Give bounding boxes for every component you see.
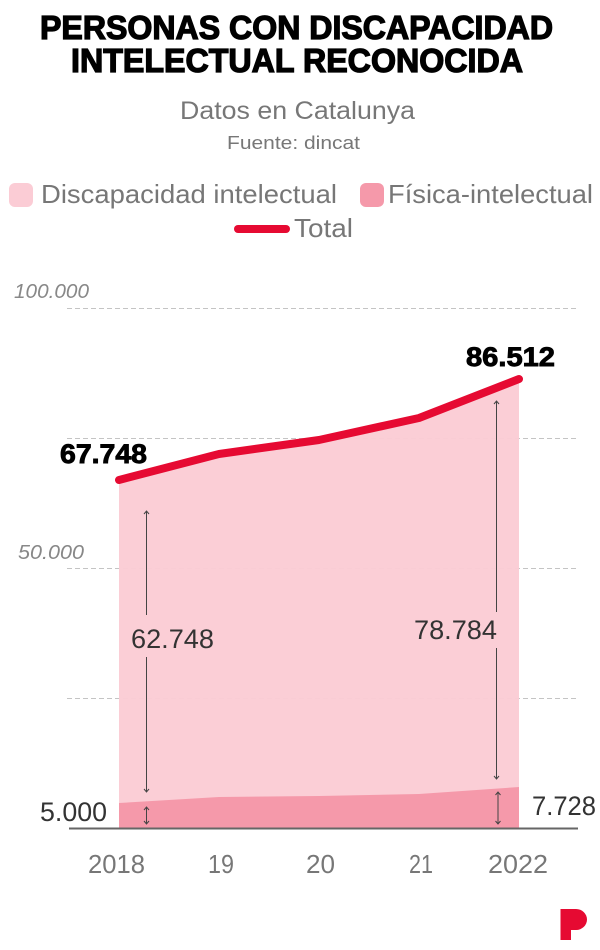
title bbox=[40, 9, 553, 79]
arrow: 7.728 bbox=[496, 792, 500, 824]
arrow: 62.748 bbox=[144, 511, 149, 792]
legend: física-intelectual: Física-intelectual bbox=[388, 179, 593, 209]
arrow: 78.784 bbox=[494, 401, 499, 779]
x axis labels: 20 bbox=[306, 849, 335, 879]
y axis labels bbox=[14, 281, 89, 564]
title: INTELECTUAL RECONOCIDA bbox=[71, 42, 523, 79]
legend: total bbox=[238, 213, 353, 243]
x axis labels bbox=[88, 849, 548, 879]
y axis labels: 100.000 bbox=[14, 281, 89, 303]
source: Fuente: dincat bbox=[227, 132, 360, 153]
line: total bbox=[119, 379, 519, 480]
area: física-intelectual bbox=[119, 787, 519, 828]
chart bbox=[14, 281, 596, 879]
x axis labels: 21 bbox=[409, 849, 433, 879]
label: 5.000: 5.000 bbox=[40, 797, 107, 827]
legend: total: Total bbox=[294, 213, 353, 243]
area: discapacidad intelectual bbox=[119, 379, 519, 828]
y axis labels: 50.000 bbox=[18, 542, 84, 564]
arrow: 5.000 bbox=[144, 807, 149, 824]
label: 86.512: 86.512 bbox=[466, 342, 555, 372]
baseline bbox=[69, 828, 578, 830]
icon: publisher logo bbox=[560, 909, 587, 940]
label: 78.784: 78.784 bbox=[414, 615, 497, 645]
label: 7.728: 7.728 bbox=[532, 791, 596, 821]
subtitle: Datos en Catalunya bbox=[180, 97, 415, 125]
label: 67.748: 67.748 bbox=[60, 439, 147, 469]
title: PERSONAS CON DISCAPACIDAD bbox=[40, 9, 553, 46]
x axis labels: 2018 bbox=[88, 849, 145, 879]
x axis labels: 19 bbox=[208, 849, 234, 879]
x axis labels: 2022 bbox=[488, 849, 548, 879]
legend bbox=[9, 179, 593, 243]
label: 62.748: 62.748 bbox=[131, 624, 214, 654]
legend: discapacidad intelectual: Discapacidad intelectual bbox=[41, 179, 337, 209]
